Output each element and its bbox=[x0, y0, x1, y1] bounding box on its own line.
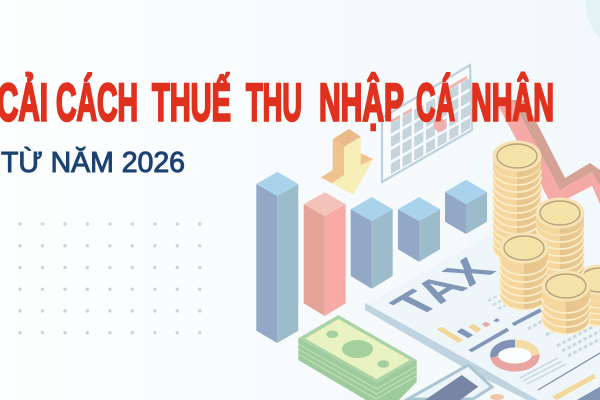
bar 4 bbox=[398, 197, 440, 262]
lower card bbox=[408, 365, 504, 400]
tax document bbox=[365, 235, 600, 400]
slate strip bbox=[577, 387, 600, 400]
coin stack front left bbox=[500, 232, 548, 310]
divider lines bbox=[468, 308, 542, 352]
bar chart bbox=[256, 172, 487, 343]
coin stack middle bbox=[536, 198, 584, 284]
title bbox=[0, 72, 554, 133]
yellow strip bbox=[552, 374, 596, 400]
dot grid bbox=[9, 213, 211, 344]
thin rule bbox=[538, 353, 600, 390]
coin stack front right bbox=[542, 270, 590, 334]
calendar bbox=[382, 65, 472, 182]
title: THUẾ bbox=[152, 73, 231, 133]
bar 3 bbox=[351, 197, 393, 289]
calendar header marks bbox=[391, 76, 467, 123]
title: CÁ bbox=[416, 73, 455, 133]
coin stack right back bbox=[583, 264, 600, 327]
mini bar marks bbox=[437, 318, 500, 343]
bar 5 bbox=[445, 180, 487, 234]
calendar cells bbox=[390, 75, 472, 176]
title: CÁCH bbox=[56, 73, 138, 133]
money stack bbox=[298, 315, 417, 400]
corner circle bbox=[585, 0, 600, 38]
bar 1 bbox=[256, 172, 298, 343]
icon: down arrow bbox=[321, 129, 373, 195]
TAX label: TAX bbox=[380, 252, 507, 323]
coin stacks bbox=[492, 140, 600, 334]
bar 2 bbox=[304, 192, 346, 316]
calendar marker bbox=[434, 118, 446, 132]
coin stack tall bbox=[492, 140, 542, 262]
subtitle: TỪ NĂM 2026 bbox=[1, 146, 185, 179]
text rows bbox=[488, 295, 600, 384]
trend arrow line bbox=[495, 100, 600, 205]
title: NHẬP bbox=[319, 72, 404, 133]
title: THU bbox=[246, 74, 302, 133]
donut chart bbox=[494, 343, 536, 368]
